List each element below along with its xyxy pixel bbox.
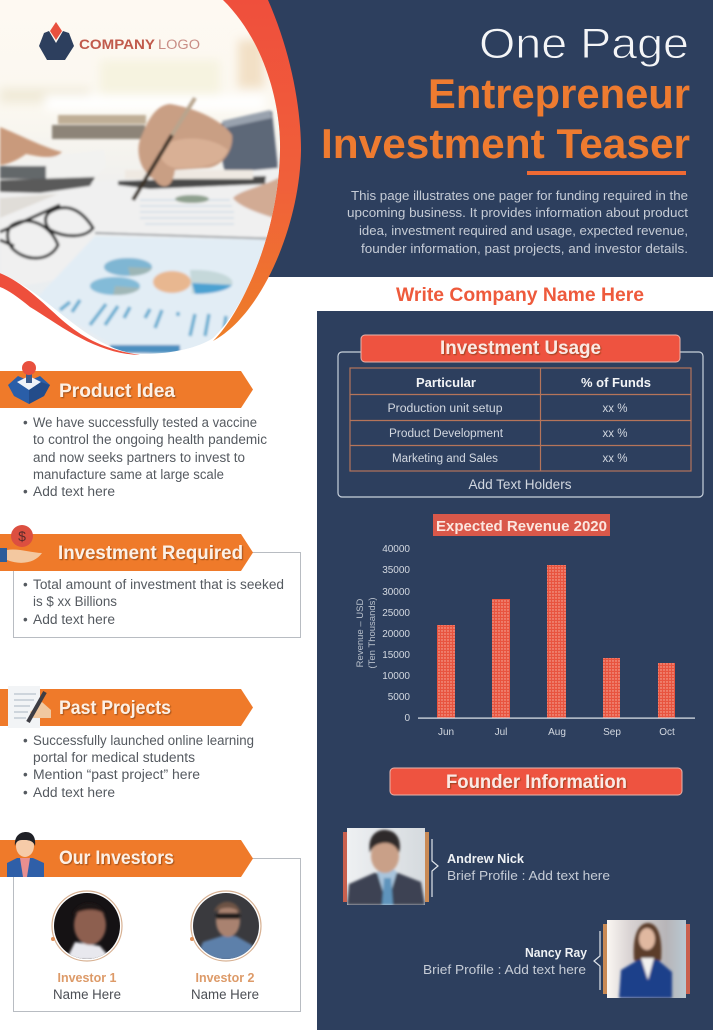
usage table: Product Development — [389, 428, 504, 440]
panel: product idea — [0, 361, 267, 499]
icon: hand with coin: $ — [18, 528, 26, 544]
logo mark — [39, 22, 74, 60]
y axis title — [355, 597, 378, 669]
intro paragraph: upcoming business. It provides information about product — [347, 205, 688, 220]
icon: hand with coin — [0, 525, 42, 563]
pie charts — [104, 258, 152, 276]
y axis labels: 10000 — [382, 671, 410, 682]
x axis labels: Jun — [438, 727, 454, 738]
bullets: We have successfully tested a vaccine — [33, 415, 257, 430]
bullets: Add text here — [33, 484, 115, 499]
hero photo: business desk with charts — [0, 0, 290, 360]
banner — [0, 371, 253, 408]
intro paragraph: This page illustrates one pager for funding required in the — [351, 188, 688, 203]
logo wordmark: COMPANY — [79, 37, 155, 52]
y axis title: (Ten Thousands) — [367, 597, 378, 669]
founder: Andrew Nick — [343, 828, 610, 905]
y axis labels: 25000 — [382, 608, 410, 619]
top navy header background — [262, 0, 713, 277]
bullets: • — [23, 733, 28, 748]
books — [58, 115, 146, 124]
sleeve — [215, 111, 278, 173]
investor 2: Name Here — [191, 987, 259, 1002]
y axis title: Revenue – USD — [355, 599, 366, 667]
panel: our investors — [0, 832, 300, 1012]
founder text — [423, 945, 588, 977]
y axis labels — [382, 544, 410, 724]
bullets: and now seeks partners to invest to — [33, 450, 245, 465]
bullets: • — [23, 484, 28, 499]
y axis labels: 35000 — [382, 565, 410, 576]
banner — [0, 840, 253, 877]
bullets — [23, 415, 267, 499]
usage table: Production unit setup — [388, 403, 502, 415]
x axis labels: Aug — [548, 727, 566, 738]
heading: Investment Required — [58, 543, 243, 564]
connector bracket — [594, 931, 600, 990]
founder text — [447, 851, 610, 883]
logo wordmark — [79, 37, 200, 52]
panel: investment required — [0, 525, 300, 638]
bullets: • — [23, 415, 28, 430]
x axis labels: Jul — [495, 727, 507, 738]
founder: Nancy Ray — [423, 920, 690, 998]
hand — [138, 104, 232, 186]
company logo — [39, 22, 200, 60]
bullets: portal for medical students — [33, 750, 195, 765]
bullets — [23, 577, 284, 627]
banner — [0, 534, 253, 571]
title: Entrepreneur — [428, 70, 690, 117]
calculator — [0, 154, 95, 182]
x axis labels: Oct — [659, 727, 675, 738]
y axis labels: 40000 — [382, 544, 410, 555]
founder text: Brief Profile : Add text here — [423, 962, 586, 977]
bars — [60, 300, 226, 336]
table edge — [0, 164, 280, 276]
title — [321, 20, 690, 167]
panel: investment usage — [338, 335, 703, 497]
documents — [140, 200, 234, 224]
bullets: • — [23, 785, 28, 800]
icon: businessman — [7, 832, 44, 877]
banner — [0, 689, 253, 726]
title: One Page — [479, 20, 689, 68]
y axis labels: 30000 — [382, 587, 410, 598]
bullets: to control the ongoing health pandemic — [33, 432, 267, 447]
photo frame — [603, 920, 690, 998]
investor 1 — [51, 891, 122, 1002]
investor 1: Investor 1 — [58, 970, 116, 985]
curved orange swoosh — [213, 0, 301, 341]
y axis labels: 20000 — [382, 629, 410, 640]
title: Investment Teaser — [321, 120, 690, 167]
panel: expected revenue chart — [355, 514, 695, 738]
pen — [133, 135, 172, 200]
y axis labels: 5000 — [388, 692, 410, 703]
founder information heading: Founder Information — [446, 772, 627, 793]
company name heading: Write Company Name Here — [396, 285, 644, 306]
tablet — [118, 176, 266, 189]
investor 2 — [190, 891, 261, 1002]
icon: document and pen — [8, 686, 51, 728]
bullets: Total amount of investment that is seeked — [33, 577, 284, 592]
bullets: Mention “past project” here — [33, 767, 200, 782]
bullets: • — [23, 577, 28, 592]
table caption: Add Text Holders — [468, 477, 572, 492]
usage table — [350, 368, 691, 471]
connector bracket — [432, 839, 438, 897]
intro paragraph: founder information, past projects, and investor details. — [361, 241, 688, 256]
heading: Product Idea — [59, 381, 175, 402]
x axis — [418, 718, 695, 719]
right hand — [233, 177, 280, 220]
founder text: Andrew Nick — [447, 851, 525, 866]
founder text: Nancy Ray — [525, 945, 588, 960]
usage table: xx % — [603, 403, 627, 415]
bullets: manufacture same at large scale — [33, 467, 224, 482]
usage table: Particular — [416, 375, 476, 390]
bullets — [23, 733, 254, 800]
investor 1: Name Here — [53, 987, 121, 1002]
icon: box with bulb — [8, 361, 50, 404]
left hand — [0, 127, 62, 165]
x axis labels: Sep — [603, 727, 621, 738]
heading: Past Projects — [59, 698, 171, 719]
x axis labels — [438, 727, 675, 738]
usage table: % of Funds — [581, 375, 651, 390]
bullets: is $ xx Billions — [33, 594, 117, 609]
y axis labels: 15000 — [382, 650, 410, 661]
usage table: xx % — [603, 428, 627, 440]
founder text: Brief Profile : Add text here — [447, 868, 610, 883]
bullets: Successfully launched online learning — [33, 733, 254, 748]
glasses — [0, 205, 93, 258]
bars — [437, 565, 675, 718]
panel: past projects — [0, 686, 254, 800]
chart heading: Expected Revenue 2020 — [436, 518, 607, 535]
left red swoosh — [0, 273, 140, 355]
bullets: • — [23, 767, 28, 782]
title underline — [527, 171, 686, 175]
bullets: • — [23, 612, 28, 627]
investor 2: Investor 2 — [196, 970, 254, 985]
bullets: Add text here — [33, 785, 115, 800]
investment usage header: Investment Usage — [440, 338, 601, 359]
y axis labels: 0 — [404, 713, 410, 724]
photo frame — [343, 828, 429, 905]
paper — [0, 194, 58, 218]
right navy panel — [317, 311, 713, 1030]
intro paragraph: idea, investment required and usage, expected revenue, — [359, 223, 688, 238]
investment usage header — [361, 335, 680, 362]
logo wordmark: LOGO — [158, 37, 200, 52]
founder information heading — [390, 768, 682, 795]
intro paragraph — [347, 188, 688, 256]
usage table: Marketing and Sales — [392, 453, 498, 465]
bullets: Add text here — [33, 612, 115, 627]
usage table: xx % — [603, 453, 627, 465]
heading: Our Investors — [59, 848, 174, 869]
